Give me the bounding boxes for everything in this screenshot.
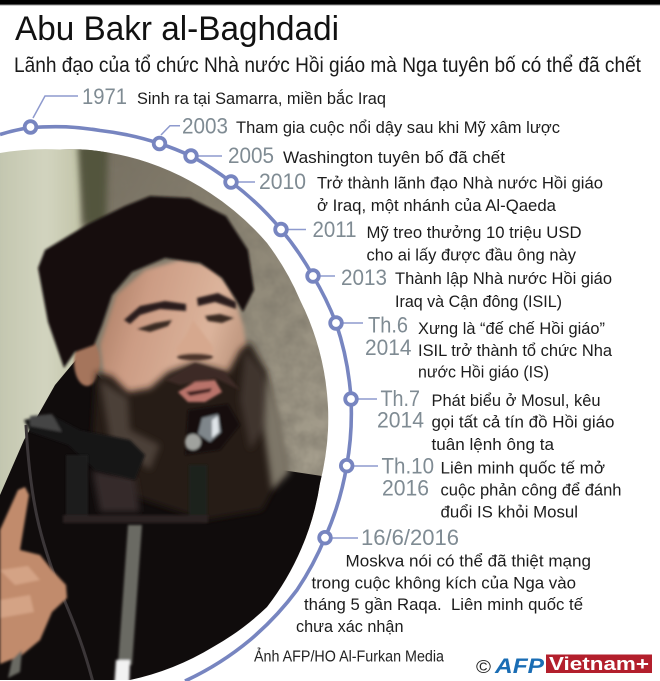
timeline entry: 1971: 1971 [82, 84, 127, 109]
photo credit: Ảnh AFP/HO Al-Furkan Media [254, 648, 444, 666]
copyright symbol: © [476, 657, 491, 677]
shirt [92, 470, 140, 512]
left microphone [24, 414, 145, 480]
timeline entry: 16/6/2016: Moskva nói có thể đã thiệt mạng [346, 552, 591, 570]
timeline entry: July 2014: Th.7 [380, 386, 420, 411]
eyes [137, 314, 234, 332]
timeline entry: October 2016: đuổi IS khỏi Mosul [440, 502, 578, 522]
timeline entry: June 2014: ISIL trở thành tổ chức Nha [418, 341, 613, 360]
timeline entry: 16/6/2016: chưa xác nhận [296, 617, 404, 636]
timeline entry: 2013: Thành lập Nhà nước Hồi giáo [395, 269, 612, 288]
timeline entry: October 2016 [341, 454, 622, 522]
timeline entry: 2003: Tham gia cuộc nổi dậy sau khi Mỹ xâm lược [236, 118, 560, 137]
timeline entry: 2013 [307, 265, 612, 311]
timeline entry: 2010 [225, 169, 603, 215]
clothing [0, 355, 335, 681]
dark streak on wall [78, 145, 108, 225]
eyebrows [124, 293, 236, 324]
timeline entry: 2011: Mỹ treo thưởng 10 triệu USD [366, 223, 582, 242]
face [100, 260, 250, 410]
blue timeline arc [0, 127, 351, 681]
timeline entry: June 2014 [330, 312, 613, 382]
timeline entry: October 2016: Liên minh quốc tế mở [440, 458, 605, 478]
nose [176, 320, 214, 360]
timeline entry: 2010: 2010 [259, 169, 306, 194]
timeline entry: July 2014: 2014 [377, 408, 424, 432]
title: Abu Bakr al-Baghdadi [15, 10, 339, 48]
portrait photo in circle [0, 130, 335, 681]
timeline entry: 16/6/2016: tháng 5 gần Raqa. Liên minh quốc tế [304, 595, 584, 614]
ear [74, 338, 100, 386]
timeline entry: 16/6/2016: 16/6/2016 [361, 525, 459, 550]
timeline entry: 2005: Washington tuyên bố đã chết [283, 148, 505, 167]
timeline entry: October 2016: Th.10 [382, 454, 434, 478]
timeline entry: 2005 [185, 143, 505, 168]
timeline entry: 2005: 2005 [228, 143, 274, 168]
timeline entry: June 2014: Xưng là “đế chế Hồi giáo” [418, 319, 605, 338]
microphone stand pole [114, 525, 142, 681]
timeline entry: 2013: Iraq và Cận đông (ISIL) [395, 292, 562, 311]
timeline entry: July 2014 [345, 386, 614, 454]
microphone clips and bar [63, 455, 208, 523]
timeline entry: July 2014: gọi tất cả tín đồ Hồi giáo [432, 412, 614, 432]
timeline entry: July 2014: Phát biểu ở Mosul, kêu [432, 391, 600, 410]
beard [92, 342, 290, 520]
timeline entry: 1971 [25, 84, 386, 133]
microphone cable [26, 425, 95, 681]
timeline entry: 2011: cho ai lấy được đầu ông này [366, 246, 576, 264]
timeline entry: June 2014: nước Hồi giáo (IS) [418, 362, 549, 382]
timeline entry: 2013: 2013 [341, 265, 387, 290]
background: stone wall [60, 145, 335, 545]
timeline entry: June 2014: 2014 [365, 335, 412, 360]
right microphone [185, 404, 240, 455]
AFP logo: AFP [494, 655, 545, 678]
timeline entry: October 2016: 2016 [382, 476, 429, 500]
timeline entry: 1971: Sinh ra tại Samarra, miền bắc Iraq [137, 89, 386, 108]
timeline entry: 2003 [154, 114, 560, 149]
background: pale wall [0, 149, 85, 495]
timeline entry: 2010: Trở thành lãnh đạo Nhà nước Hồi giáo [317, 174, 603, 192]
Vietnam+ logo: Vietnam+ [549, 654, 649, 674]
raised hand [0, 487, 67, 678]
timeline entry: 2010: ở Iraq, một nhánh của Al-Qaeda [317, 196, 557, 215]
timeline entry: July 2014: tuân lệnh ông ta [432, 435, 555, 454]
AFP and Vietnam+ logos [476, 654, 652, 678]
top black bar [0, 0, 660, 6]
timeline entry: 16/6/2016: trong cuộc không kích của Nga vào [312, 574, 576, 592]
timeline entry: 2003: 2003 [182, 114, 228, 138]
timeline entry: 2011: 2011 [312, 217, 356, 242]
moustache and lips [165, 363, 240, 402]
timeline entry: 16/6/2016 [296, 525, 591, 636]
timeline entry: 2011 [275, 217, 582, 264]
timeline entry: October 2016: cuộc phản công để đánh [440, 480, 622, 500]
turban [38, 196, 254, 368]
timeline entry: June 2014: Th.6 [368, 312, 408, 338]
